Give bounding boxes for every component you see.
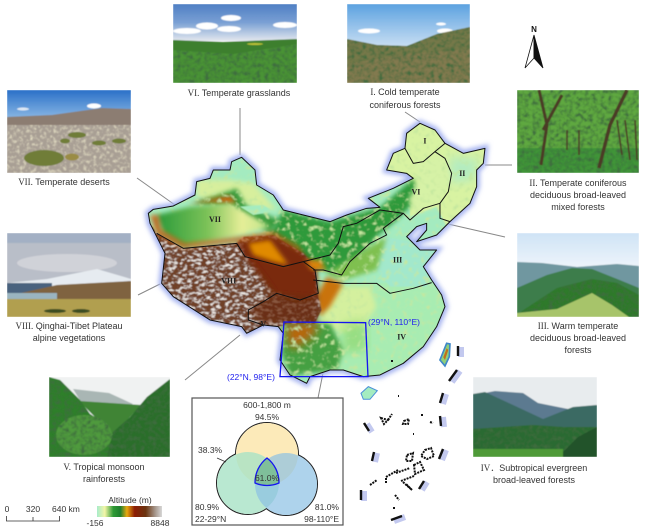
caption: VIII: VIII. Qinghai-Tibet Plateau (16, 321, 122, 331)
photo: tropical monsoon rainforests (49, 377, 170, 457)
caption: IV: broad-leaved forests (493, 475, 576, 485)
island: Taiwan (440, 343, 450, 366)
scale bar (5, 504, 80, 521)
caption: VIII (16, 321, 122, 343)
caption: V: rainforests (83, 474, 126, 484)
region labels: V (260, 320, 266, 329)
reef clusters (370, 361, 434, 508)
photo: cold temperate forests (347, 4, 470, 83)
leader lines (137, 108, 512, 423)
caption: III: deciduous broad-leaved (530, 333, 626, 343)
photo: alpine vegetations (7, 233, 131, 317)
circle: latitude (217, 452, 279, 514)
caption: VII: VII. Temperate deserts (18, 177, 110, 187)
caption: V (63, 462, 145, 484)
nine-dash line (361, 346, 461, 521)
caption: III: forests (564, 345, 592, 355)
circle: longitude (255, 453, 317, 515)
terrain: Tibet plateau (148, 220, 322, 335)
caption: II (529, 178, 627, 212)
altitude legend: -156 (86, 518, 104, 528)
photo: subtropical forests (473, 377, 597, 457)
altitude legend: Altitude (m) (108, 495, 152, 505)
caption: I (369, 87, 441, 110)
terrain: Tarim basin (157, 203, 270, 247)
white circle base (217, 423, 317, 515)
caption: VIII: alpine vegetations (33, 333, 106, 343)
venn labels: 81.0% (315, 502, 339, 512)
photo: temperate deserts (7, 90, 131, 173)
venn labels (195, 400, 339, 524)
region labels: III (393, 256, 402, 265)
scale bar: 0 (5, 504, 10, 514)
region labels: VI (412, 188, 420, 197)
venn labels: 22-29°N (195, 514, 226, 524)
venn labels: 61.0% (255, 473, 279, 483)
venn labels: 38.3% (198, 445, 223, 455)
region labels (209, 136, 465, 341)
photo: warm temperate forests (517, 233, 639, 317)
scale bar: 320 (26, 504, 40, 514)
altitude legend: 8848 (151, 518, 170, 528)
terrain (148, 124, 484, 382)
caption: V: V. Tropical monsoon (63, 462, 145, 472)
overlap outline (255, 458, 279, 485)
venn labels: 94.5% (255, 412, 279, 422)
circle outlines (217, 423, 317, 515)
caption: I: coniferous forests (369, 100, 441, 110)
island: Hainan (361, 387, 377, 399)
venn labels: 600-1,800 m (243, 400, 291, 410)
venn panel (192, 398, 343, 525)
study area box (280, 322, 368, 377)
photo: temperate grasslands (173, 4, 297, 83)
caption: IV (481, 463, 587, 485)
region labels: IV (397, 332, 406, 341)
label: southwest corner of study area: (22°N, 98°E) (227, 372, 275, 382)
South China Sea islands (361, 346, 461, 521)
icon: north arrow (525, 25, 543, 68)
map glow (148, 123, 485, 383)
coastline and border (148, 123, 485, 383)
map of China (130, 120, 497, 399)
caption: VI: VI. Temperate grasslands (188, 88, 291, 98)
venn labels: 98-110°E (304, 514, 339, 524)
region labels: I (423, 136, 427, 145)
label: northeast corner of study area: (29°N, 110°E) (368, 317, 420, 327)
venn labels: 80.9% (195, 502, 220, 512)
caption: II: II. Temperate coniferous (529, 178, 627, 188)
region labels: VIII (221, 277, 236, 286)
caption: IV: IV．Subtropical evergreen (481, 463, 587, 473)
region labels: VII (209, 215, 221, 224)
caption: II: deciduous broad-leaved (530, 190, 626, 200)
caption: III: III. Warm temperate (538, 321, 618, 331)
icon: north arrow: N (531, 25, 537, 34)
caption: I: I. Cold temperate (370, 87, 440, 97)
scale bar: 640 km (52, 504, 80, 514)
caption: III (530, 321, 626, 355)
region labels: II (459, 169, 465, 178)
caption: II: mixed forests (551, 202, 605, 212)
region boundaries (157, 143, 452, 325)
altitude legend (86, 495, 170, 528)
photo: temperate mixed forests (517, 90, 639, 173)
circle: altitude (236, 423, 298, 485)
